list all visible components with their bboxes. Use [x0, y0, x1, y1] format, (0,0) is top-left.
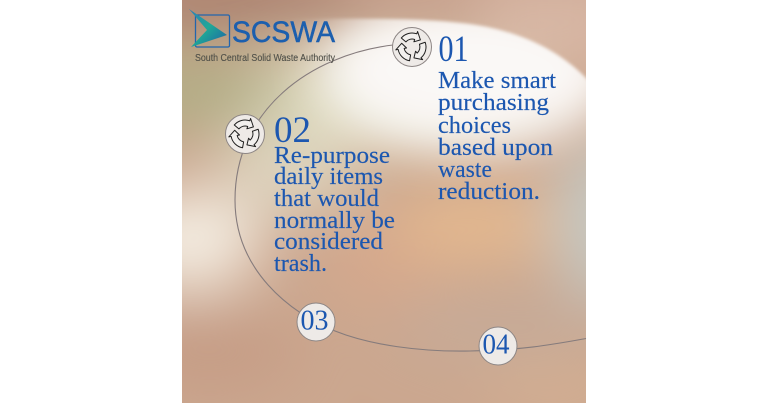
step 01 description: waste	[438, 157, 492, 183]
step 01 description: purchasing	[438, 90, 549, 116]
logo: SCSWA	[189, 9, 335, 64]
step 02 number: 02	[274, 110, 311, 151]
logo tagline: South Central Solid Waste Authority	[195, 53, 335, 64]
step 04 marker	[479, 327, 517, 365]
step 02 text	[274, 110, 395, 277]
logo wordmark: SCSWA	[232, 16, 335, 49]
step 04 marker: 04	[482, 330, 510, 360]
step 03 marker: 03	[300, 306, 328, 336]
step 02 description	[274, 143, 395, 277]
step 02 description: normally be	[274, 208, 395, 234]
step 02 description: trash.	[274, 251, 327, 277]
step 01 description	[438, 68, 556, 205]
icon: recycle step 01	[392, 28, 432, 66]
step 02 description: daily items	[274, 164, 383, 190]
step 01 description: choices	[438, 113, 511, 139]
step 02 description: Re-purpose	[274, 143, 390, 169]
step 02 description: that would	[274, 186, 379, 212]
step 01 description: Make smart	[438, 68, 556, 94]
step 01 number: 01	[438, 29, 468, 70]
icon: logo square and arrow	[189, 9, 230, 47]
icon: recycle step 02	[226, 114, 264, 154]
step 03 marker	[297, 303, 335, 341]
step 01 description: reduction.	[438, 179, 540, 205]
step 01 text	[438, 29, 556, 205]
step 01 description: based upon	[438, 135, 553, 161]
step 02 description: considered	[274, 229, 383, 255]
panel: gradient background	[182, 0, 586, 403]
connector curve	[235, 45, 586, 351]
